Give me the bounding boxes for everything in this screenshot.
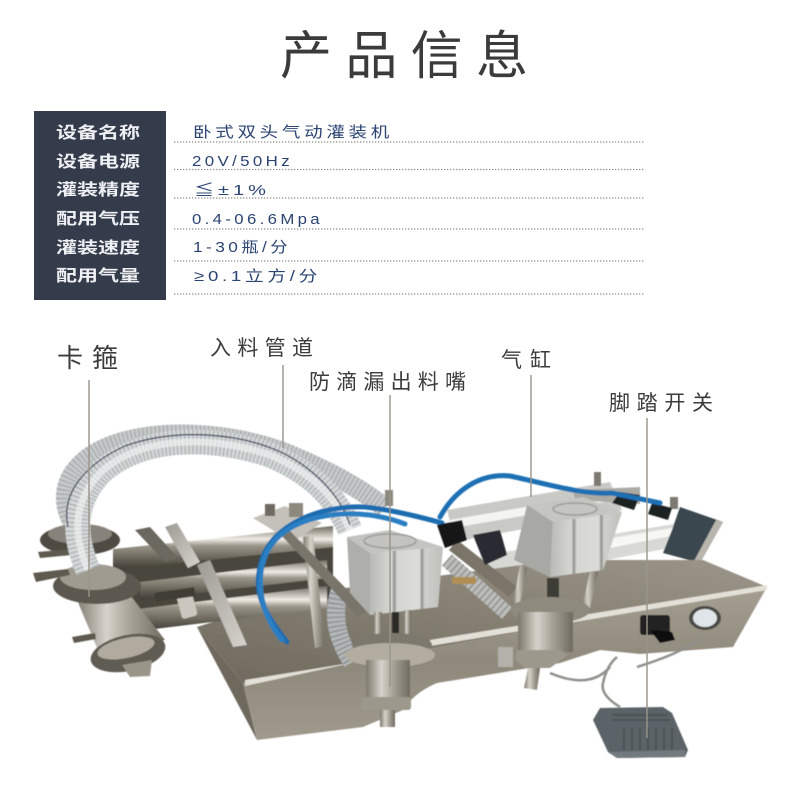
base tray top surface: [197, 560, 767, 683]
pressure gauge: [689, 606, 721, 630]
control switch: [640, 615, 675, 643]
panel: product specification table: [34, 111, 645, 300]
label column text: 配用气量: [56, 267, 140, 285]
right filling cylinder: [514, 497, 622, 577]
clamp brackets: [135, 523, 247, 647]
base tray front face: [243, 587, 767, 740]
front edge highlight: [245, 585, 767, 686]
callout: 气缸: 气缸: [501, 349, 551, 372]
rear hose: [66, 435, 385, 535]
label column text: 设备名称: [56, 123, 140, 142]
label column text: 配用气压: [56, 210, 140, 228]
title: 产品信息: [280, 28, 528, 86]
blue air tubes: [258, 476, 660, 642]
callout: 防滴漏出料嘴: 防滴漏出料嘴: [309, 371, 466, 394]
label column text: 灌装速度: [56, 238, 140, 257]
value column text: ≥0.1立方/分: [194, 268, 321, 285]
panel: dark label column: [34, 111, 166, 300]
left T-body: [33, 524, 198, 679]
value column text: 卧式双头气动灌装机: [193, 124, 393, 141]
fluid mount plate: [253, 490, 393, 648]
diagonal bar and right-side hose: [447, 545, 513, 613]
pipes: [113, 526, 333, 632]
value column text: [192, 124, 393, 285]
callout: 入料管道: [210, 337, 313, 448]
label column text: 灌装精度: [56, 180, 140, 199]
machine illustration: [33, 435, 767, 758]
label column text: 设备电源: [56, 152, 140, 171]
label column text: [56, 123, 140, 285]
left cylinder rods and nozzle: [345, 610, 435, 727]
value column text: 20V/50Hz: [192, 153, 293, 170]
foot pedal: [593, 707, 688, 758]
value column text: 0.4-06.6Mpa: [192, 211, 323, 228]
callout: 脚踏开关: 脚踏开关: [609, 392, 713, 415]
front hose: [67, 435, 352, 662]
rear cylinders and right mounting plate: [447, 472, 723, 582]
value column text: 1-30瓶/分: [193, 239, 291, 256]
foot cable loop: [550, 640, 700, 707]
value column text: ≦±1%: [194, 182, 270, 199]
callout: 入料管道: 入料管道: [210, 337, 313, 360]
right cylinder rods and nozzle: [510, 565, 598, 690]
plate label: [498, 647, 513, 667]
left filling cylinder: [347, 530, 443, 615]
callout: 卡箍: 卡箍: [57, 343, 118, 373]
air clamp, solenoid and fitting: [437, 520, 507, 584]
base tray side: [197, 627, 257, 740]
